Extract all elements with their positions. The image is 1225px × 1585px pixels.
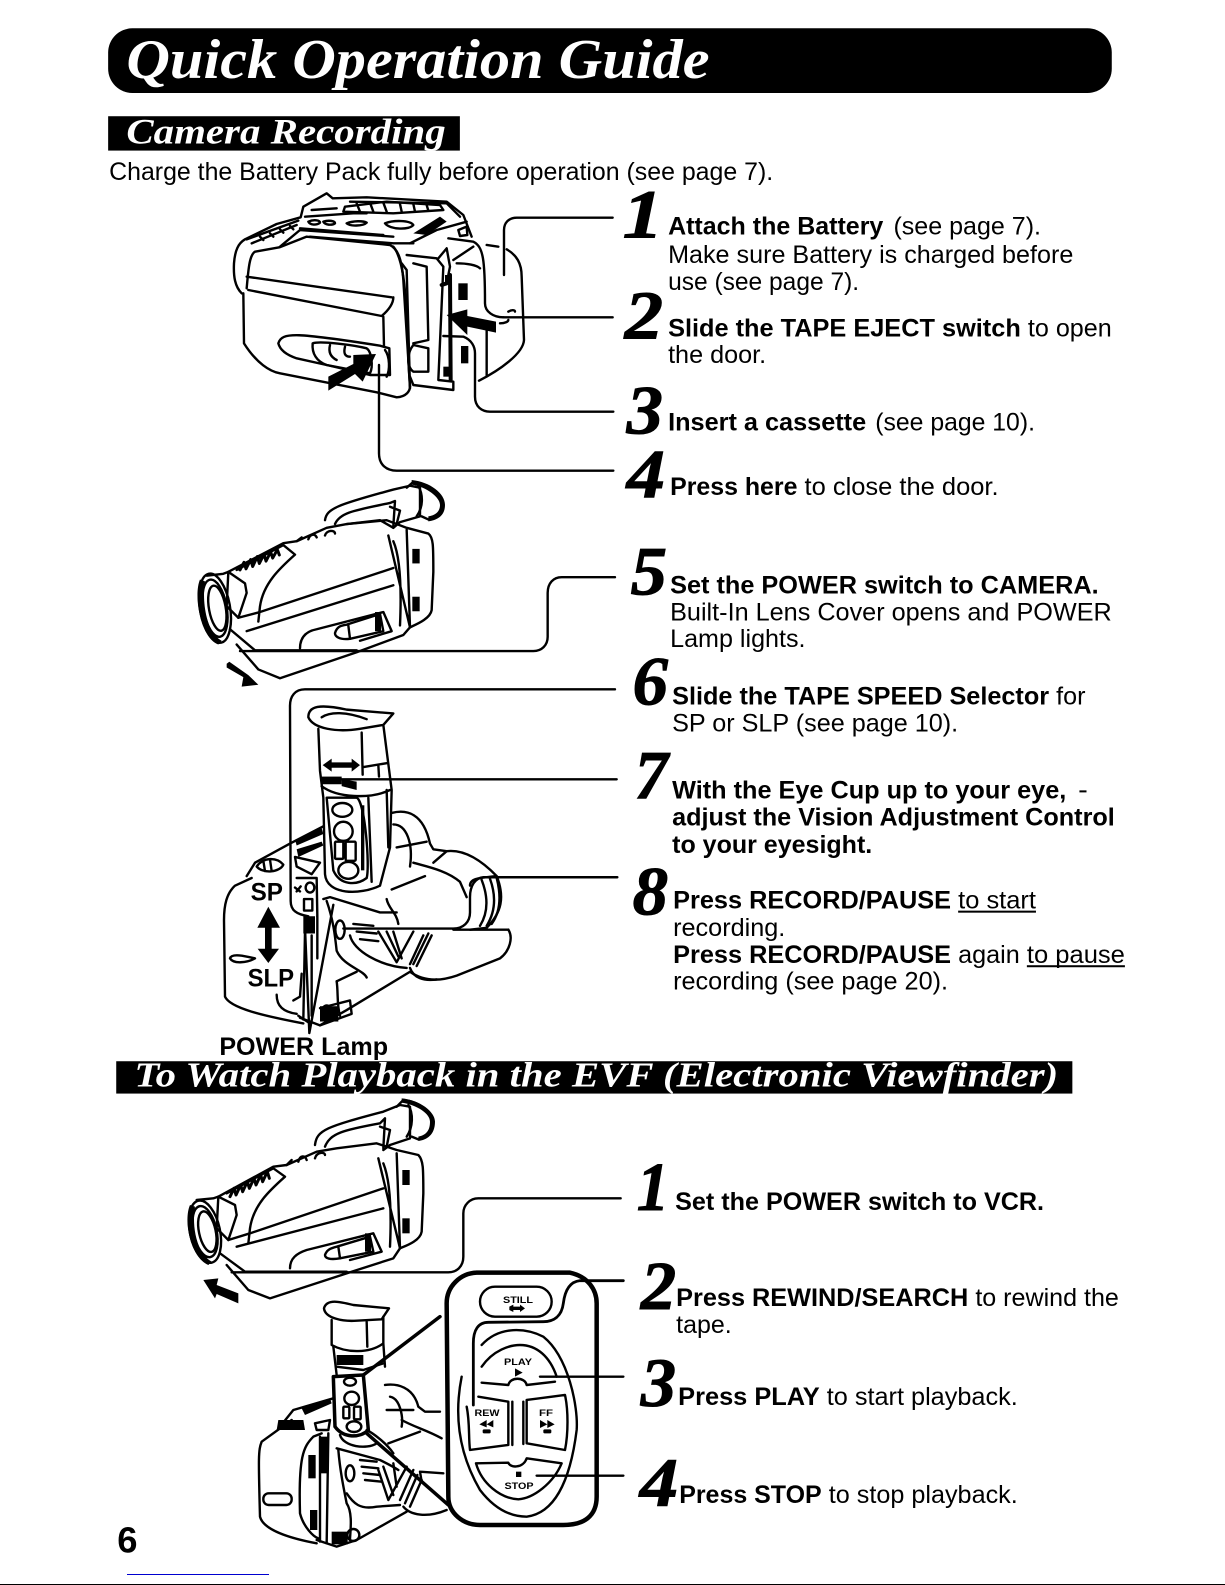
step 2: slide tape eject: Slide the TAPE EJECT switch [668,315,1021,343]
callout leader lines: playback steps 2 to 4 [473,1281,623,1476]
playback step 4: Press STOP [679,1481,822,1509]
step 8: record pause: recording. [673,914,785,942]
step 8: record pause: 8 [633,854,668,930]
step 4: press here: 4 [624,436,665,512]
playback step 4: 4 [638,1445,678,1521]
step 6: tape speed selector: SP or SLP (see page 10). [672,710,958,738]
step 1: attach the battery: 1 [623,177,663,253]
illustration: camcorder opening the cassette door [234,193,524,397]
playback step 3: Press PLAY [678,1383,820,1411]
step 2: slide tape eject: to open [1028,315,1112,343]
step 1: attach the battery: (see page 7). [893,212,1041,240]
arrow: slide power switch [227,662,258,687]
step 6: tape speed selector: 6 [633,643,669,719]
step 5: power switch: 5 [631,533,667,609]
step 8: record pause: again [958,941,1020,969]
step 8: record pause: to pause [1027,941,1125,969]
illustration: camcorder rear view with viewfinder and tape speed selector [224,706,511,1025]
step 4: press here: to close the door. [805,473,999,501]
page number: 6 [117,1519,137,1560]
step 3: insert a cassette: (see page 10). [875,409,1035,437]
playback step 4: to stop playback. [829,1481,1018,1509]
step 8: record pause: Press RECORD/PAUSE [673,941,951,969]
step 3: insert a cassette [626,373,1035,449]
step 7: eye cup: to your eyesight. [672,831,872,859]
playback step 1: Set the POWER switch to VCR. [675,1188,1044,1216]
step 3: insert a cassette: 3 [626,373,663,449]
step 8: record pause: recording (see page 20). [673,967,948,995]
STILL button [480,1287,552,1317]
step 8: record pause: to start [958,887,1036,915]
arrow: tape eject switch [447,309,496,335]
button text: FF [539,1408,554,1418]
title banner: Quick Operation Guide [126,29,710,91]
step 8: record pause: Press RECORD/PAUSE [673,887,951,915]
button text: STOP [504,1481,534,1491]
step 7: eye cup: With the Eye Cup up to your eye, [672,776,1066,804]
button labels [479,1305,555,1477]
step 3: insert a cassette: Insert a cassette [668,409,866,437]
step 5: power switch [631,533,1112,653]
step 5: power switch: Lamp lights. [670,625,806,653]
button text [474,1295,554,1491]
step 7: eye cup: 7 [635,737,671,813]
label: POWER Lamp: POWER Lamp [219,1033,388,1061]
arrow: press here [328,354,376,391]
button cluster outlines [458,1330,577,1517]
step 1: attach the battery: Make sure Battery is charged before [668,241,1073,269]
illustration: camcorder rear view for playback [259,1302,447,1547]
step 2: slide tape eject: 2 [623,278,663,354]
playback step 1: 1 [637,1149,669,1225]
step 5: power switch: Set the POWER switch to CAMERA. [670,571,1099,599]
playback step 2: to rewind the [975,1284,1119,1312]
step 2: slide tape eject [623,278,1112,369]
step 2: slide tape eject: the door. [668,341,766,369]
button text: PLAY [504,1357,532,1367]
title banner [108,28,1112,93]
step 6: tape speed selector: for [1056,682,1085,710]
step 5: power switch: Built-In Lens Cover opens and POWER [670,599,1112,627]
playback step 2: tape. [676,1311,732,1339]
playback step 3: to start playback. [827,1383,1018,1411]
step 6: tape speed selector: Slide the TAPE SPEED Selector [672,682,1049,710]
illustration: camcorder side view with power switch [194,480,445,687]
labels: SP and SLP: SP [251,879,283,907]
playback step 2 [640,1248,1119,1339]
step 4: press here: Press here [670,473,797,501]
panel frame and zoom connector lines [333,1273,597,1525]
button text: STILL [503,1295,534,1305]
labels: SP and SLP: SLP [248,964,294,992]
step 1: attach the battery: use (see page 7). [668,268,859,296]
labels: SP and SLP [248,879,294,992]
arrow: SP SLP direction [257,907,280,963]
playback step 2: Press REWIND/SEARCH [676,1284,968,1312]
heading: Camera Recording: Camera Recording [126,112,446,152]
playback step 3: 3 [640,1345,676,1421]
heading: To Watch Playback: To Watch Playback in the EVF (Electronic Viewfinder) [134,1055,1058,1095]
step 4: press here [624,436,999,512]
step 1: attach the battery [623,177,1073,296]
callout leader line: playback step 1 [232,1198,621,1272]
arrow: vision adjust [323,759,360,772]
step 7: eye cup [635,737,1115,859]
playback step 1 [637,1149,1044,1225]
step 1: attach the battery: Attach the Battery [668,212,883,240]
playback step 3 [640,1345,1018,1421]
small control cluster inside the viewfinder arm [343,1378,361,1432]
button text: REW [474,1408,500,1418]
panel: enlarged control buttons [333,1273,597,1525]
callout leader lines: steps 6 to 8 and POWER lamp [290,689,617,1033]
intro text: Charge the Battery Pack fully before operation (see page 7). [109,158,773,186]
illustration: camcorder side view for playback [184,1098,435,1303]
arrow: slide switch to VCR [203,1278,238,1303]
playback step 4 [638,1445,1018,1521]
callout leader line: step 5 [240,577,615,651]
step 8: record pause [633,854,1125,995]
playback step 2: 2 [640,1248,676,1324]
step 6: tape speed selector [633,643,1085,738]
callout leader lines: steps 1 to 4 [379,218,613,471]
step 7: eye cup: adjust the Vision Adjustment Control [672,804,1115,832]
